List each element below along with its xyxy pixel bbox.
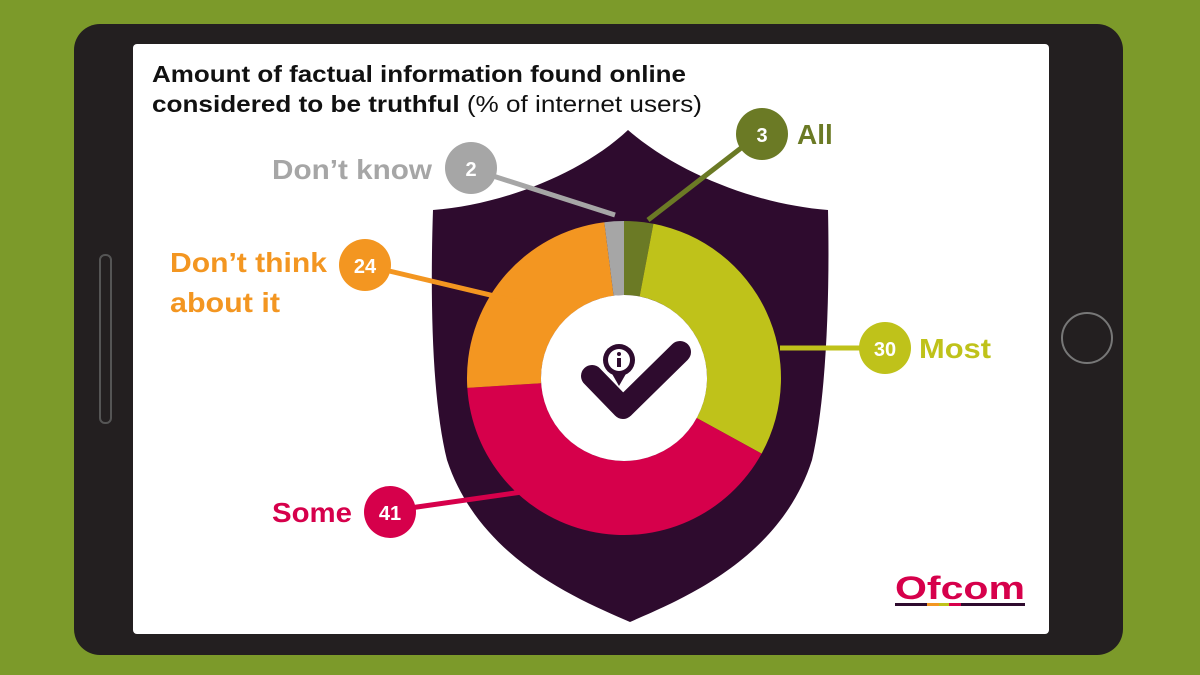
callout: Most: Most — [919, 333, 991, 364]
shield — [432, 130, 828, 622]
title: Amount of factual information found online — [152, 61, 686, 87]
segment: Some — [467, 383, 762, 535]
segment: Don't know — [604, 221, 624, 296]
callout: Most: 30 — [874, 339, 896, 361]
segment: All — [624, 221, 653, 296]
icon: check with info — [592, 344, 680, 408]
title: considered to be truthful (% of internet users) — [152, 91, 702, 117]
callout: Some: 41 — [379, 503, 401, 525]
callout: All: All — [797, 119, 833, 150]
callout: Don't know — [272, 142, 615, 215]
callout: Don't think about it: Don’t think — [170, 247, 327, 278]
callout: Don't know: 2 — [465, 159, 477, 181]
callout: Some — [272, 486, 522, 538]
callout: Don't think about it: about it — [170, 287, 280, 318]
callout: All: 3 — [756, 125, 768, 147]
segment: Most — [640, 224, 781, 454]
callout: Don't think about it: 24 — [354, 256, 377, 278]
callout: All — [648, 108, 833, 220]
donut chart — [467, 221, 781, 535]
title — [152, 61, 702, 117]
callout: Most — [780, 322, 991, 374]
callout: Some: Some — [272, 497, 352, 528]
callout: Don't know: Don’t know — [272, 154, 432, 185]
segment: Don't think — [467, 222, 614, 388]
callout: Don't think about it — [170, 239, 520, 318]
logo: Ofcom: Ofcom — [895, 570, 1025, 606]
